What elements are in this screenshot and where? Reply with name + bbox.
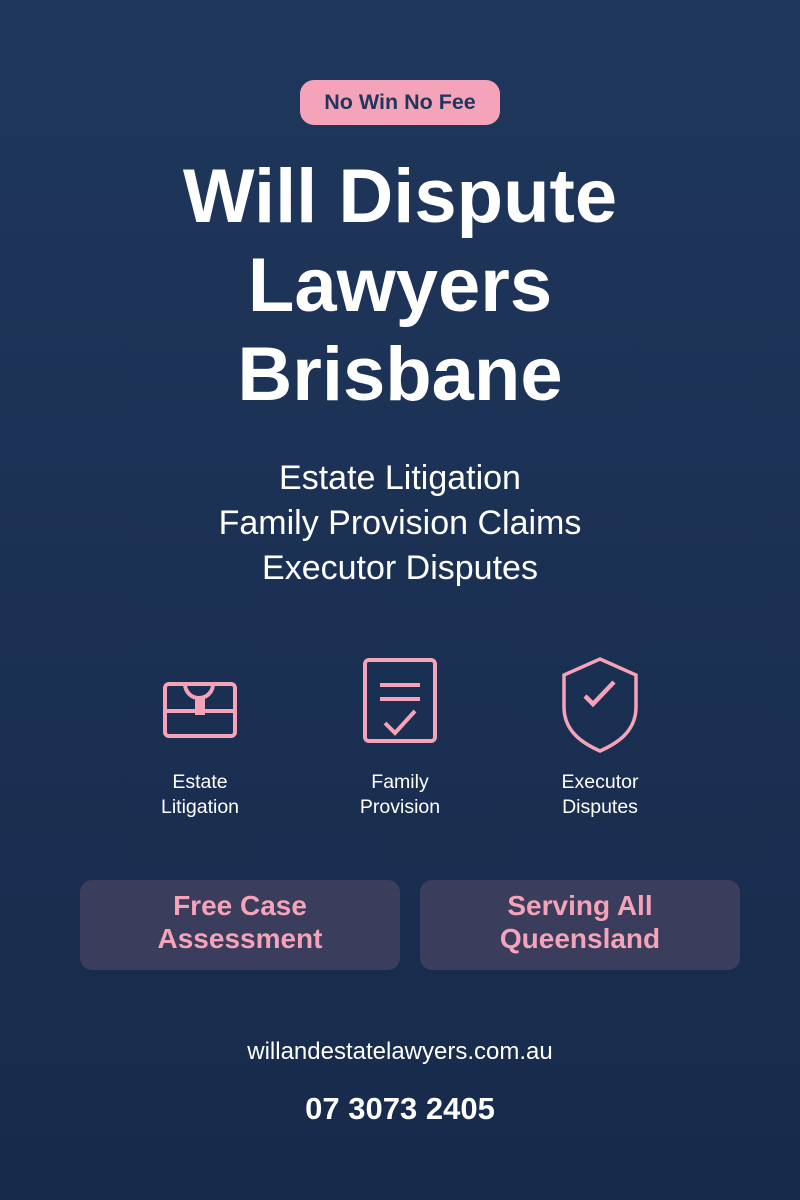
website: willandestatelawyers.com.au: [247, 1038, 553, 1065]
phone: 07 3073 2405: [305, 1091, 495, 1126]
box: Free Case Assessment: [80, 880, 400, 970]
subtitle list: Family Provision Claims: [219, 504, 581, 542]
title: Lawyers: [248, 243, 552, 328]
label: Family Provision: Family: [371, 771, 429, 793]
label: Executor Disputes: [562, 771, 638, 818]
subtitle list: [219, 459, 581, 587]
box: Serving All Queensland: Serving All: [507, 890, 653, 921]
label: Executor Disputes: Disputes: [562, 796, 638, 818]
box: Free Case Assessment: Free Case: [173, 890, 307, 921]
badge: No Win No Fee: [300, 80, 500, 125]
icon: chest: [163, 682, 237, 738]
title: Brisbane: [237, 332, 563, 417]
box: Free Case Assessment: Assessment: [158, 923, 322, 954]
label: Family Provision: [360, 771, 440, 818]
box: Serving All Queensland: [420, 880, 740, 970]
icon: document with check: [363, 658, 437, 743]
subtitle list: Estate Litigation: [279, 459, 521, 497]
label: Estate Litigation: [161, 771, 239, 818]
subtitle list: Executor Disputes: [262, 549, 538, 587]
title: Will Dispute: [183, 154, 617, 239]
label: Estate Litigation: Litigation: [161, 796, 239, 818]
label: Estate Litigation: Estate: [172, 771, 228, 793]
label: Family Provision: Provision: [360, 796, 440, 818]
icon: shield with check: [562, 657, 638, 753]
label: Executor Disputes: Executor: [562, 771, 638, 793]
title: [183, 154, 617, 417]
badge: No Win No Fee: No Win No Fee: [324, 90, 476, 114]
box: Serving All Queensland: Queensland: [500, 923, 660, 954]
